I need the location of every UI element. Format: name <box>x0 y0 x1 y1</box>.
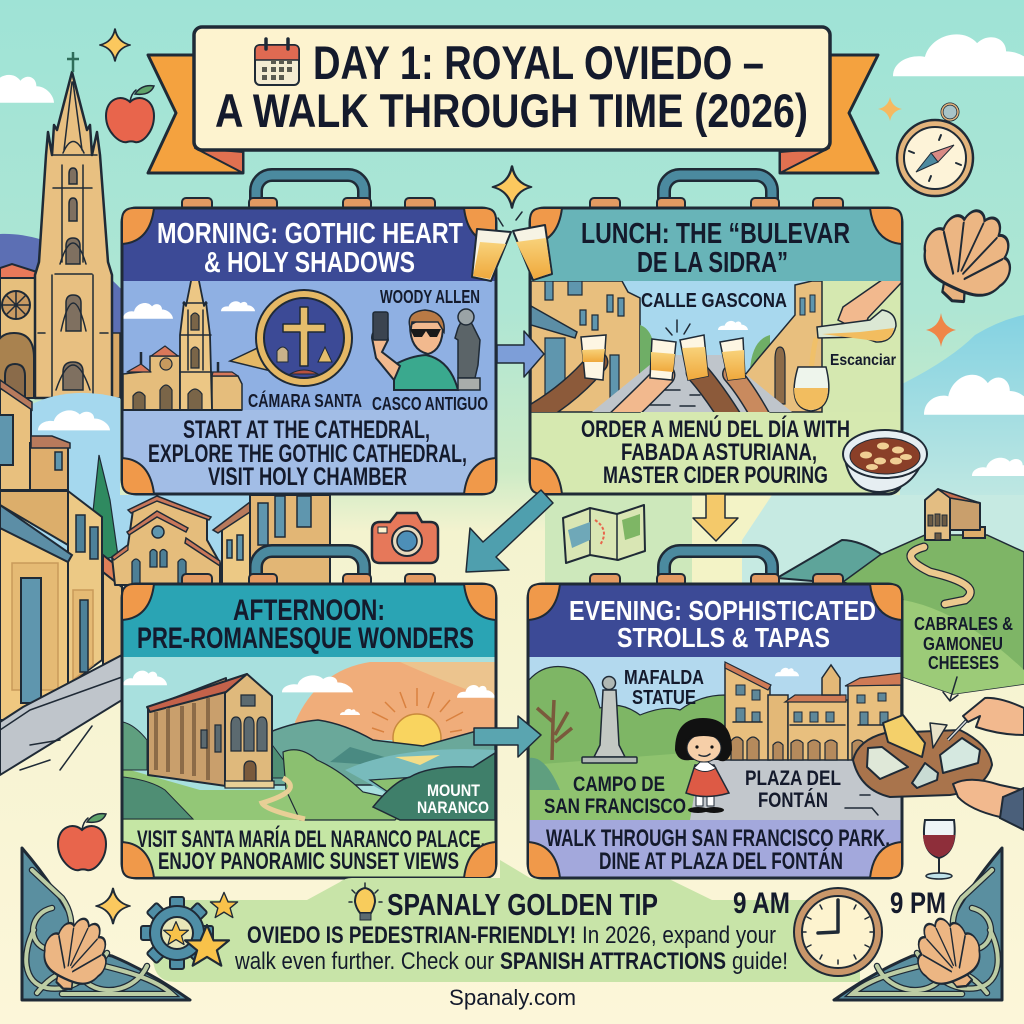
cloud: top left <box>0 75 54 103</box>
left ribbon <box>148 55 243 173</box>
central church between panels <box>112 496 220 585</box>
icon: light bulb <box>349 883 382 920</box>
morning labels: CÁMARA SANTA <box>248 390 362 411</box>
icon: calendar <box>255 39 299 85</box>
arrow: lunch to evening <box>693 494 738 541</box>
label: cheeses: GAMONEU <box>923 634 1003 654</box>
evening header: STROLLS & TAPAS <box>617 622 830 653</box>
arrow: afternoon to evening <box>474 716 541 757</box>
arrow: lunch to afternoon <box>466 490 553 572</box>
suitcase handles: top row <box>182 175 843 223</box>
panel: morning <box>122 208 496 494</box>
afternoon body <box>122 584 496 878</box>
afternoon header: PRE-ROMANESQUE WONDERS <box>137 622 474 655</box>
icon: clock <box>794 888 882 976</box>
tip text: In 2026, expand your <box>582 922 776 949</box>
evening labels: STATUE <box>632 687 696 709</box>
clock labels: 9 PM <box>890 887 946 920</box>
lunch labels: Escanciar <box>830 352 896 369</box>
evening description: WALK THROUGH SAN FRANCISCO PARK, <box>546 825 890 852</box>
panel: afternoon <box>122 584 496 878</box>
morning image area <box>123 281 495 410</box>
lunch header <box>530 208 902 281</box>
tip green background <box>153 860 860 982</box>
footer: website: Spanaly.com <box>449 985 576 1010</box>
arrow: morning to lunch <box>497 331 544 377</box>
icon: star center top <box>493 166 531 208</box>
evening labels: FONTÁN <box>758 789 828 812</box>
cloud: right lower <box>972 458 1024 476</box>
icon: apple top <box>106 86 154 142</box>
clock labels <box>733 887 946 920</box>
title banner <box>194 27 830 150</box>
label: Mount Naranco: NARANCO <box>417 798 489 817</box>
evening frame <box>528 584 902 878</box>
afternoon description <box>137 825 485 875</box>
afternoon frame <box>122 584 496 878</box>
tip heading <box>349 883 658 922</box>
icon: star top left <box>100 29 130 61</box>
right hill with church <box>777 489 1024 694</box>
left scenery: town buildings <box>0 380 122 775</box>
lunch corners <box>530 208 902 494</box>
label: Mount Naranco: MOUNT <box>427 781 481 800</box>
morning labels <box>248 287 488 414</box>
mountain behind cathedral <box>0 234 122 340</box>
lunch header: DE LA SIDRA” <box>637 247 788 279</box>
right street buildings between panels <box>213 495 330 585</box>
evening labels: MAFALDA <box>624 667 704 689</box>
evening labels: SAN FRANCISCO <box>544 795 686 818</box>
label: cheeses: CHEESES <box>928 653 999 673</box>
icon: orange star right <box>926 313 956 347</box>
evening labels <box>544 667 841 818</box>
icon: apple bottom <box>58 814 106 870</box>
corner knot right <box>834 848 1002 1001</box>
icon: Cámara Santa medallion <box>230 290 352 386</box>
tip heading: SPANALY GOLDEN TIP <box>387 887 658 922</box>
lunch description: MASTER CIDER POURING <box>603 462 828 489</box>
panel: lunch <box>525 208 927 494</box>
illustration: statue and tree <box>537 676 637 763</box>
icon: folded map <box>563 505 645 563</box>
lunch frame <box>530 208 902 494</box>
icon: star top right <box>878 97 902 121</box>
clock labels: 9 AM <box>733 887 790 920</box>
tip text: walk even further. Check our <box>234 948 494 975</box>
lunch image: street scene <box>531 281 901 412</box>
morning frame <box>122 208 496 494</box>
illustration: cheese board with hands <box>853 698 1024 830</box>
lunch labels <box>641 290 896 369</box>
evening header: EVENING: SOPHISTICATED <box>569 595 876 626</box>
icon: gear and stars <box>141 892 238 969</box>
icon: beer glass left <box>472 229 511 281</box>
lunch labels: CALLE GASCONA <box>641 290 787 312</box>
lunch description <box>581 415 850 489</box>
right ribbon <box>780 55 878 173</box>
lunch body <box>530 208 902 494</box>
morning body <box>122 208 496 494</box>
icon: beer glass right <box>498 212 552 280</box>
morning description: START AT THE CATHEDRAL, <box>183 416 430 444</box>
illustration: small cathedral <box>123 261 242 410</box>
afternoon image: sunset landscape <box>123 657 495 820</box>
suitcase handles: bottom row <box>182 551 843 599</box>
morning description: VISIT HOLY CHAMBER <box>208 463 407 491</box>
afternoon description: ENJOY PANORAMIC SUNSET VIEWS <box>158 848 459 875</box>
lunch description: FABADA ASTURIANA, <box>621 439 817 466</box>
evening body <box>528 584 902 878</box>
evening header <box>528 584 902 657</box>
lunch description: ORDER A MENÚ DEL DÍA WITH <box>581 415 850 443</box>
afternoon header: AFTERNOON: <box>233 594 385 627</box>
evening image: park and plaza <box>529 657 901 820</box>
label: cheeses <box>914 614 1013 701</box>
illustration: cider toast hands <box>532 319 770 412</box>
evening labels: PLAZA DEL <box>745 767 841 790</box>
morning header: MORNING: GOTHIC HEART <box>157 218 463 250</box>
title text line 1: DAY 1: ROYAL OVIEDO – <box>313 36 764 89</box>
left scenery: sky and cloud <box>30 393 330 600</box>
icon: shell right <box>908 196 1024 318</box>
lunch header: LUNCH: THE “BULEVAR <box>581 218 850 250</box>
corner knot left <box>22 848 190 1001</box>
panel: evening <box>528 584 902 878</box>
icon: camera <box>372 513 438 563</box>
cloud: right middle <box>924 375 1024 415</box>
morning corners <box>122 208 496 494</box>
morning labels: WOODY ALLEN <box>380 287 480 307</box>
icon: compass <box>897 104 973 196</box>
tip text: guide! <box>732 948 788 975</box>
evening description <box>546 825 890 875</box>
illustration: tourist selfie with statue <box>372 309 480 390</box>
tip text: SPANISH ATTRACTIONS <box>500 948 726 975</box>
label: Mount Naranco <box>417 781 489 817</box>
icon: star bottom left <box>96 888 130 924</box>
tip text <box>234 922 788 975</box>
icon: fabada bowl <box>843 430 927 492</box>
evening labels: CAMPO DE <box>573 773 665 796</box>
illustration: Mafalda <box>675 718 732 813</box>
afternoon corners <box>122 584 496 878</box>
morning description: EXPLORE THE GOTHIC CATHEDRAL, <box>148 440 467 468</box>
evening corners <box>528 584 902 878</box>
evening description: DINE AT PLAZA DEL FONTÁN <box>599 847 843 875</box>
illustration: cider pouring <box>794 266 902 411</box>
illustration: Santa María del Naranco <box>147 674 274 788</box>
icon: wine glass <box>923 820 955 879</box>
tip text: OVIEDO IS PEDESTRIAN-FRIENDLY! <box>247 922 576 949</box>
morning labels: CASCO ANTIGUO <box>372 394 488 414</box>
title text line 2: A WALK THROUGH TIME (2026) <box>215 84 808 137</box>
left scenery: large cathedral <box>0 52 120 398</box>
afternoon header <box>122 584 496 657</box>
cloud: top right <box>893 34 1024 76</box>
afternoon description: VISIT SANTA MARÍA DEL NARANCO PALACE, <box>137 825 485 853</box>
morning header <box>122 208 496 281</box>
morning description <box>148 416 467 491</box>
morning header: & HOLY SHADOWS <box>204 247 415 279</box>
